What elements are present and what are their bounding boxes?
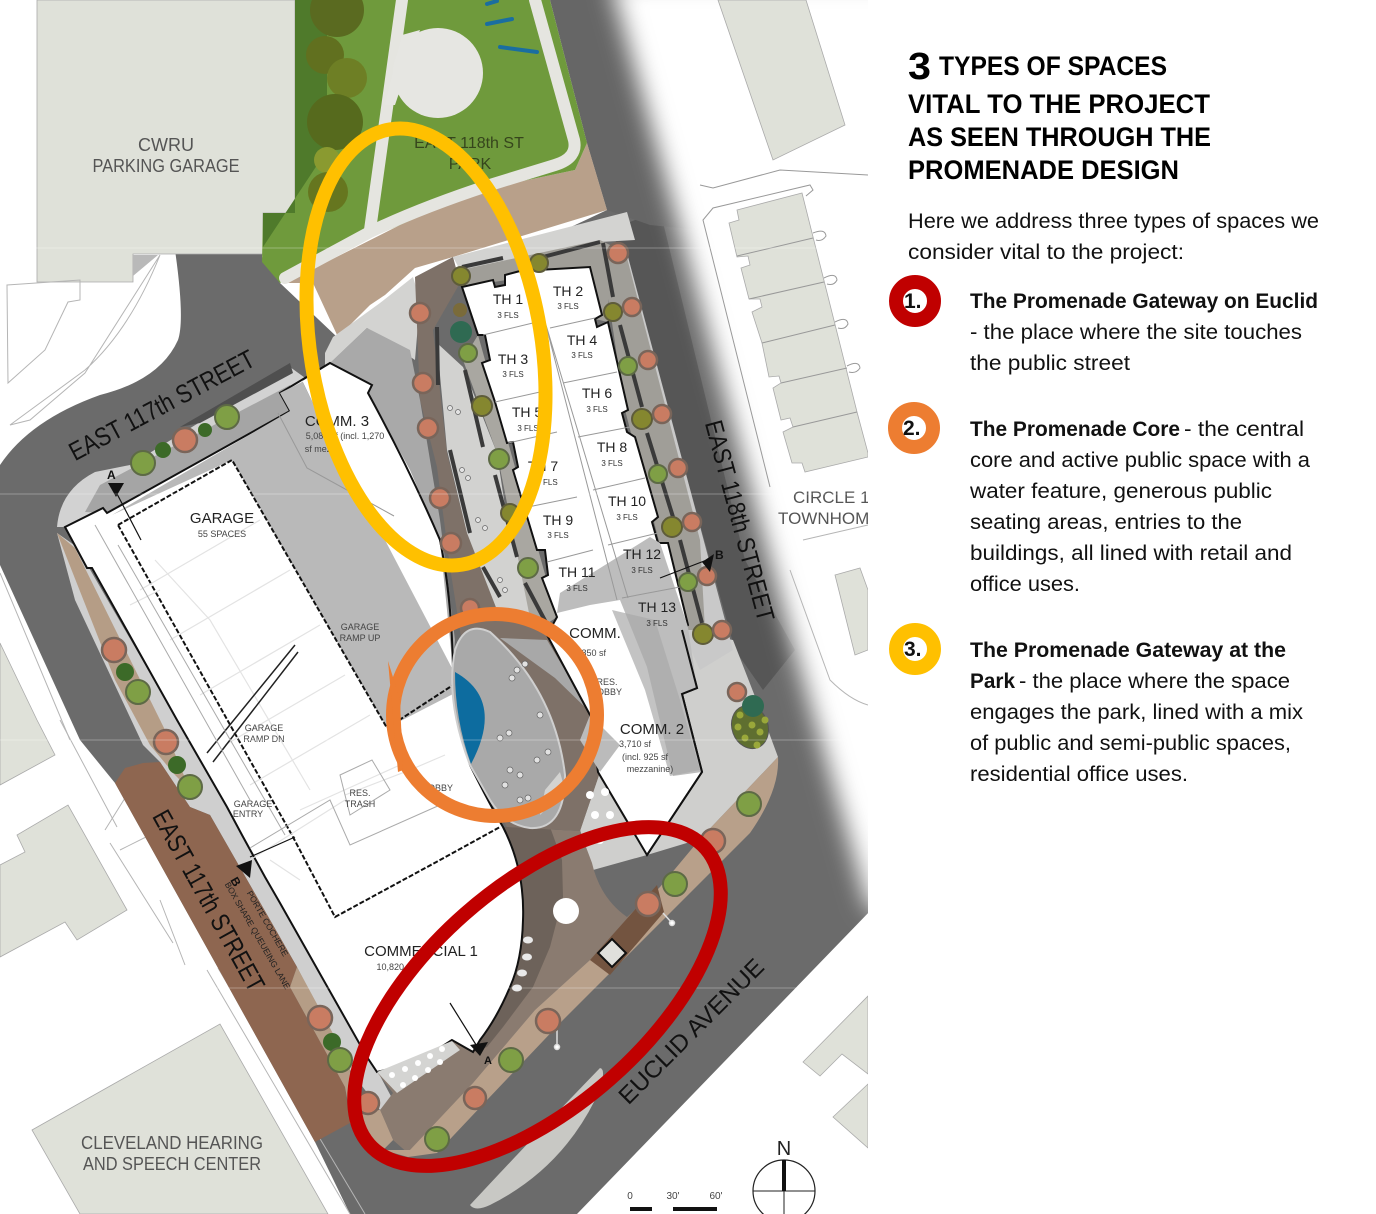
section markers: B xyxy=(227,874,244,889)
intro text: Here we address three types of spaces we xyxy=(908,210,1319,233)
townhome labels: TH 10 xyxy=(608,493,646,509)
yellow oval: gateway at the park xyxy=(276,110,576,584)
section markers: B xyxy=(715,548,724,562)
concrete sidewalks xyxy=(57,277,420,1110)
item 1 text: - the place where the site touches xyxy=(970,321,1302,344)
badge 1 xyxy=(896,282,934,320)
neighbouring building labels: CWRU xyxy=(138,135,194,155)
garage labels: GARAGE xyxy=(245,723,283,733)
commercial labels: (incl. 925 sf xyxy=(622,752,669,762)
garage labels: TRASH xyxy=(345,799,375,809)
intro text xyxy=(908,210,1319,264)
garage ramp grey area xyxy=(112,382,453,728)
site plan map xyxy=(0,0,900,1214)
badge 3 xyxy=(896,630,934,668)
promenade north xyxy=(415,212,733,831)
intro text: consider vital to the project: xyxy=(908,241,1184,264)
item 2 text: The Promenade Core xyxy=(970,418,1180,441)
townhome labels: 3 FLS xyxy=(502,370,524,379)
badge 2 xyxy=(895,409,933,447)
neighbouring building labels: CLEVELAND HEARING xyxy=(81,1133,263,1153)
water feature xyxy=(455,672,485,764)
garage labels: ENTRY xyxy=(233,809,263,819)
main building footprint xyxy=(64,328,533,1093)
garage labels: GARAGE xyxy=(234,799,272,809)
road labels xyxy=(64,343,780,1110)
townhome labels xyxy=(493,283,676,628)
item 3 text: Park xyxy=(970,670,1015,693)
orange oval: promenade core xyxy=(388,614,597,816)
road network xyxy=(0,0,900,1214)
townhome labels: 3 FLS xyxy=(497,311,519,320)
townhome labels: 3 FLS xyxy=(566,584,588,593)
building shadow xyxy=(557,537,702,776)
townhome labels: 3 FLS xyxy=(586,405,608,414)
street outline lines xyxy=(0,255,868,1214)
neighbouring building labels: TOWNHOMES xyxy=(778,509,892,528)
townhome labels: TH 9 xyxy=(543,512,573,528)
item 3 text xyxy=(970,639,1304,786)
townhome labels: 3 FLS xyxy=(646,619,668,628)
townhome labels: 3 FLS xyxy=(536,478,558,487)
commercial labels: LOBBY xyxy=(423,783,453,793)
garage labels xyxy=(190,510,380,819)
scale bar xyxy=(627,1191,723,1211)
porte cochere label: BOX SHARE QUEUEING LANE xyxy=(223,880,293,991)
park label: PARK xyxy=(449,156,492,173)
townhome labels: 3 FLS xyxy=(557,302,579,311)
commercial labels: 3,710 sf xyxy=(619,739,652,749)
neighbouring building labels xyxy=(81,135,892,1174)
scale bar: 0 xyxy=(627,1191,633,1202)
heading: AS SEEN THROUGH THE xyxy=(908,122,1211,152)
bench and kiosk xyxy=(590,885,664,975)
commercial labels: COMM. xyxy=(569,625,621,642)
garage labels: GARAGE xyxy=(341,622,379,632)
townhome labels: TH 13 xyxy=(638,599,676,615)
item 1 text: The Promenade Gateway on Euclid xyxy=(970,290,1318,313)
heading: 3 xyxy=(908,46,931,88)
commercial labels xyxy=(305,413,684,972)
townhome labels: TH 3 xyxy=(498,351,528,367)
item 3 text: - the place where the space xyxy=(1019,670,1290,693)
townhome labels: 3 FLS xyxy=(631,566,653,575)
item 2 text: - the central xyxy=(1184,418,1304,441)
neighbouring buildings xyxy=(0,0,868,1214)
garage labels: 55 SPACES xyxy=(198,529,246,539)
commercial labels: 1,850 sf xyxy=(574,648,607,658)
commercial labels: sf mez xyxy=(305,444,332,454)
townhome labels: TH 8 xyxy=(597,439,627,455)
townhome labels: 3 FLS xyxy=(571,351,593,360)
commercial labels: 5,080 sf (incl. 1,270 xyxy=(306,431,384,441)
neighbouring building labels: AND SPEECH CENTER xyxy=(83,1154,261,1174)
outdoor seating xyxy=(448,406,551,803)
scale bar: 30' xyxy=(666,1191,680,1202)
item 2 text: seating areas, entries to the xyxy=(970,511,1242,534)
heading: PROMENADE DESIGN xyxy=(908,155,1179,185)
townhome labels: TH 11 xyxy=(558,564,596,580)
plaza circle xyxy=(553,898,579,924)
commercial labels: RES. xyxy=(596,677,618,687)
item 1 text: the public street xyxy=(970,352,1130,375)
north arrow: N xyxy=(777,1138,791,1160)
item 3 text: The Promenade Gateway at the xyxy=(970,639,1286,662)
neighbouring building labels: CIRCLE 118 xyxy=(793,488,887,507)
townhome labels: 3 FLS xyxy=(601,459,623,468)
garage labels: RAMP UP xyxy=(340,633,380,643)
seating terrace xyxy=(377,936,533,1093)
townhome labels: TH 2 xyxy=(553,283,583,299)
road labels: EAST 118th STREET xyxy=(699,417,780,625)
porte cochere label: PORTE COCHERE xyxy=(245,889,291,958)
park label xyxy=(415,136,524,169)
garage labels: GARAGE xyxy=(190,510,254,527)
garage labels: RES. xyxy=(349,788,371,798)
park xyxy=(262,0,587,283)
badge 2: 2. xyxy=(903,417,921,440)
courtyard tables xyxy=(586,788,614,844)
East 117th brown street xyxy=(115,762,350,1142)
townhome labels: TH 7 xyxy=(528,458,558,474)
Euclid sidewalk and plaza xyxy=(350,630,778,1208)
garage labels: RAMP DN xyxy=(243,734,285,744)
badge 3: 3. xyxy=(904,638,922,661)
heading: VITAL TO THE PROJECT xyxy=(908,89,1210,119)
core plaza xyxy=(448,406,600,831)
item 2 text xyxy=(969,418,1310,596)
townhome labels: 3 FLS xyxy=(616,513,638,522)
townhome divider and outline lines xyxy=(700,170,868,487)
commercial labels: COMM. 3 xyxy=(305,413,369,430)
townhome labels: TH 6 xyxy=(582,385,612,401)
item 2 text: buildings, all lined with retail and xyxy=(970,542,1292,565)
planter walls xyxy=(437,242,702,630)
item 2 text: water feature, generous public xyxy=(969,480,1272,503)
text panel xyxy=(895,46,1319,786)
townhome labels: TH 12 xyxy=(623,546,661,562)
item 1 text xyxy=(970,290,1318,375)
heading: TYPES OF SPACES xyxy=(939,51,1167,81)
tan sidewalk xyxy=(350,757,778,1157)
road labels: EAST 117th STREET xyxy=(147,805,271,997)
street trees xyxy=(102,243,774,1151)
parking lines xyxy=(130,520,445,880)
item 3 text: residential office uses. xyxy=(970,763,1188,786)
section markers: A xyxy=(484,1055,492,1067)
street lamps xyxy=(554,913,674,1050)
commercial labels: 10,820 sf xyxy=(376,962,414,972)
townhome labels: 3 FLS xyxy=(517,424,539,433)
ramp lines xyxy=(207,645,298,762)
commercial labels: mezzanine) xyxy=(627,764,673,774)
townhome labels: TH 4 xyxy=(567,332,597,348)
median island xyxy=(470,1068,603,1208)
road labels: EUCLID AVENUE xyxy=(614,954,770,1110)
commercial labels: COMM. 2 xyxy=(620,721,684,738)
townhome labels: TH 1 xyxy=(493,291,523,307)
townhome block xyxy=(462,267,702,855)
neighbouring building labels: PARKING GARAGE xyxy=(92,156,240,176)
road labels: EAST 117th STREET xyxy=(64,343,260,467)
townhome labels: TH 5 xyxy=(512,404,542,420)
item 2 text: office uses. xyxy=(970,573,1080,596)
badge 1: 1. xyxy=(904,290,922,313)
park label: EAST 118th ST xyxy=(414,135,524,152)
section markers xyxy=(107,468,724,1067)
tan plaza north xyxy=(285,143,607,337)
unit dividers xyxy=(482,318,680,600)
scale bar: 60' xyxy=(709,1191,723,1202)
commercial labels: LOBBY xyxy=(592,687,622,697)
garage dashed outline xyxy=(117,459,500,918)
commercial labels: COMMERCIAL 1 xyxy=(364,943,478,960)
item 3 text: of public and semi-public spaces, xyxy=(970,732,1291,755)
red oval: gateway on Euclid xyxy=(297,766,778,1214)
section markers: A xyxy=(107,468,116,482)
north arrow xyxy=(753,1138,815,1214)
item 2 text: core and active public space with a xyxy=(970,449,1310,472)
heading xyxy=(908,46,1211,185)
item 3 text: engages the park, lined with a mix xyxy=(970,701,1304,724)
townhome labels: 3 FLS xyxy=(547,531,569,540)
